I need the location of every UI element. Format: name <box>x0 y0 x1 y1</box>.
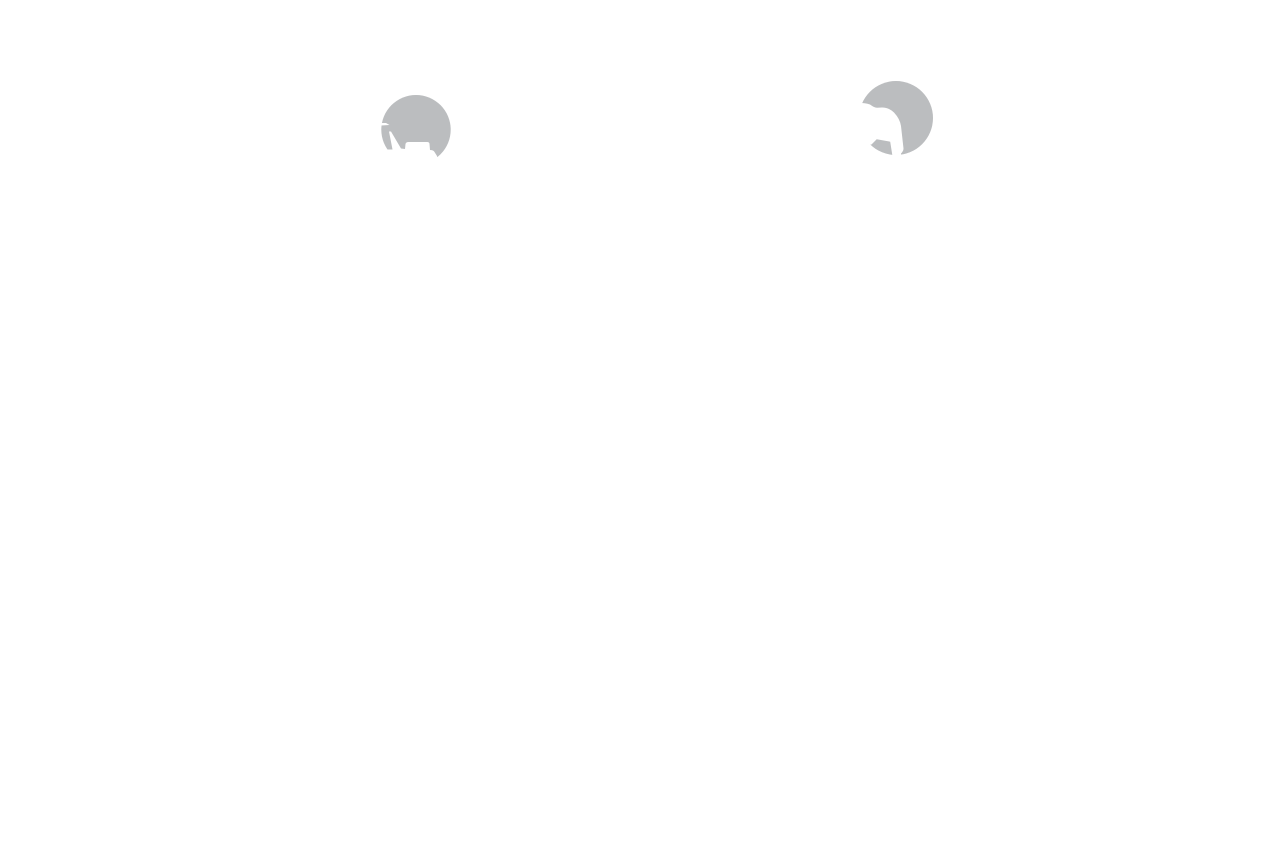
icon: right grey circle with white silhouette <box>852 81 933 162</box>
icon: left grey circle with white silhouette <box>378 95 451 170</box>
